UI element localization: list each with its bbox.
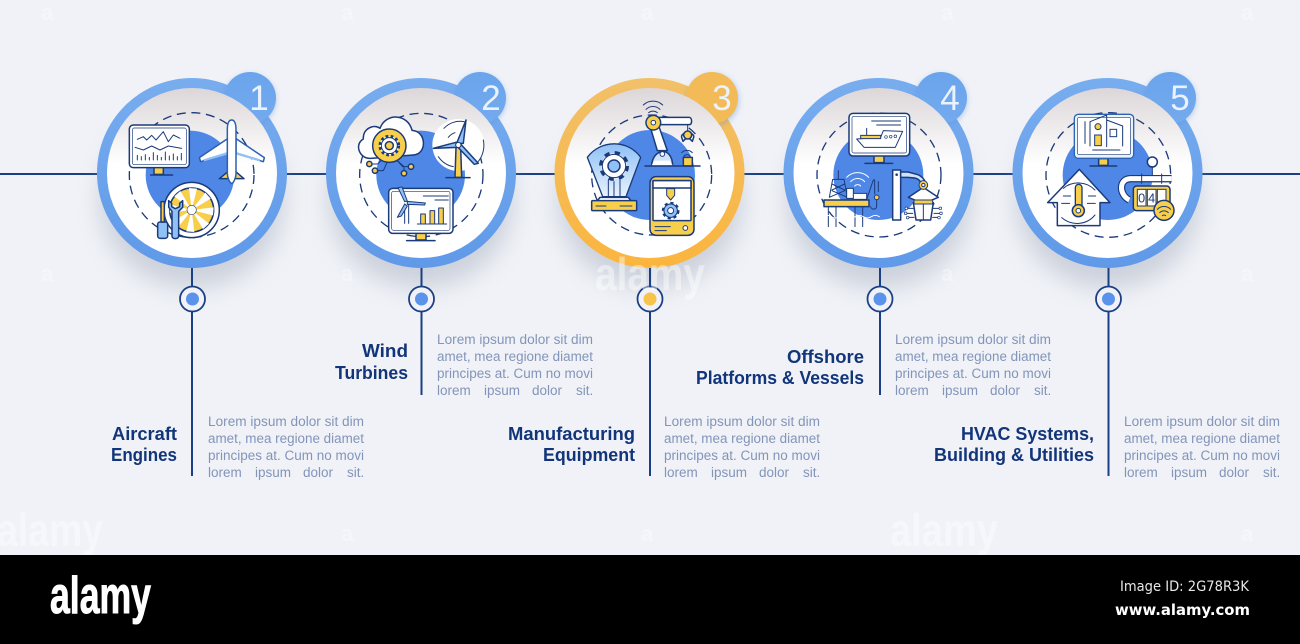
number badge 1: [224, 72, 276, 126]
body text 5: Lorem ipsum dolor sit dim: [1124, 414, 1280, 429]
body text 4: Lorem ipsum dolor sit dim: [895, 332, 1051, 347]
body text 4: dolor: [990, 383, 1021, 398]
ring 1: [97, 78, 287, 268]
body text 1: ipsum: [255, 465, 291, 480]
icon group 1: [129, 113, 264, 239]
connector 4: [868, 262, 892, 395]
icon: monitor with charts: [129, 125, 189, 175]
number badge 3: [686, 72, 739, 126]
icon: monitor with ship: [849, 113, 910, 163]
icon: 3d printer: [650, 177, 694, 235]
body text 3: lorem: [664, 465, 698, 480]
icon group 4: [817, 113, 942, 237]
watermarks: a: [1241, 0, 1254, 25]
label 3: manufacturing equipment: Equipment: [543, 445, 635, 465]
connector 5: [1096, 262, 1121, 476]
icon: hologram gear: [587, 144, 641, 211]
icon group 2: [359, 113, 484, 241]
icon: wind turbine: [432, 119, 484, 178]
icon group 5: [1046, 113, 1174, 237]
label 5: hvac systems, building and utilities: HVAC Systems,: [961, 424, 1094, 444]
body text 2: sit.: [576, 383, 593, 398]
body text 4: principes at. Cum no movi: [895, 366, 1051, 381]
icon: turbine fan: [164, 182, 219, 238]
step 1: aircraft engines: [97, 72, 287, 476]
watermarks: alamy: [0, 504, 103, 556]
icon: screwdriver and wrench: [158, 201, 183, 239]
number badge 3: 3: [712, 79, 732, 118]
icon: airplane: [199, 120, 264, 183]
alamy logo: alamy: [50, 567, 151, 625]
watermarks: a: [341, 0, 354, 25]
body text 1: sit.: [347, 465, 364, 480]
label 1: aircraft engines: Aircraft: [112, 424, 177, 444]
label 1: aircraft engines: Engines: [111, 445, 177, 465]
number badge 2: 2: [481, 79, 501, 118]
body text 3: ipsum: [711, 465, 747, 480]
body text 1: [208, 414, 364, 480]
body text 1: dolor: [303, 465, 334, 480]
icon: cloud gear: [359, 117, 423, 176]
number badge 5: [1144, 72, 1196, 126]
label 5: hvac systems, building and utilities: Building & Utilities: [934, 445, 1094, 465]
icon: robot arm: [643, 101, 700, 166]
body text 5: dolor: [1219, 465, 1250, 480]
icon: smart meter: [1121, 157, 1174, 220]
body text 3: [664, 414, 820, 480]
watermarks: a: [41, 261, 54, 286]
image id: Image ID: 2G78R3K: [1120, 579, 1250, 595]
icon: robot arm with vessel: [893, 170, 942, 220]
label 2: wind turbines: [335, 341, 408, 383]
website: www.alamy.com: [1115, 601, 1250, 619]
body text 4: [895, 332, 1051, 398]
icon: monitor with turbine: [389, 187, 453, 241]
ring 5: [1012, 78, 1202, 268]
watermarks: a: [341, 521, 354, 546]
body text 1: lorem: [208, 465, 242, 480]
number badge 4: [915, 72, 967, 126]
label 4: offshore platforms and vessels: Offshore: [787, 347, 864, 367]
body text 5: amet, mea regione diamet: [1124, 431, 1280, 446]
number badge 5: 5: [1170, 79, 1190, 118]
ring 4: [784, 78, 974, 268]
body text 5: ipsum: [1171, 465, 1207, 480]
body text 2: Lorem ipsum dolor sit dim: [437, 332, 593, 347]
icon: house thermostat: [1048, 169, 1110, 226]
ring 2: [326, 78, 516, 268]
step 3: manufacturing equipment: [554, 72, 744, 476]
watermarks: a: [941, 261, 954, 286]
step 5: hvac systems: [1012, 72, 1202, 476]
watermarks: a: [641, 521, 654, 546]
icon: oil rig: [823, 171, 879, 227]
label 4: offshore platforms and vessels: Platforms & Vessels: [696, 368, 864, 388]
label 4: offshore platforms and vessels: [696, 347, 864, 388]
watermarks: alamy: [890, 504, 998, 556]
body text 2: ipsum: [484, 383, 520, 398]
body text 4: amet, mea regione diamet: [895, 349, 1051, 364]
label 3: manufacturing equipment: Manufacturing: [508, 424, 635, 444]
body text 3: sit.: [803, 465, 820, 480]
connector 2: [409, 262, 434, 395]
watermarks: a: [941, 0, 954, 25]
watermarks: a: [341, 261, 354, 286]
body text 1: principes at. Cum no movi: [208, 448, 364, 463]
step 4: offshore platforms: [784, 72, 974, 395]
label 1: aircraft engines: [111, 424, 177, 465]
body text 3: principes at. Cum no movi: [664, 448, 820, 463]
label 5: hvac systems, building and utilities: [934, 424, 1094, 465]
body text 4: lorem: [895, 383, 929, 398]
body text 3: Lorem ipsum dolor sit dim: [664, 414, 820, 429]
number badge 4: 4: [940, 79, 960, 118]
label 2: wind turbines: Turbines: [335, 363, 408, 383]
body text 2: amet, mea regione diamet: [437, 349, 593, 364]
body text 5: principes at. Cum no movi: [1124, 448, 1280, 463]
body text 3: amet, mea regione diamet: [664, 431, 820, 446]
watermarks: a: [641, 0, 654, 25]
footer bar: [0, 555, 1300, 644]
label 3: manufacturing equipment: [508, 424, 635, 465]
body text 2: lorem: [437, 383, 471, 398]
body text 5: [1124, 414, 1280, 480]
icon: smart meter: 4: [1148, 192, 1155, 206]
body text 5: sit.: [1263, 465, 1280, 480]
horizontal timeline: [0, 173, 1300, 175]
body text 5: lorem: [1124, 465, 1158, 480]
watermarks: a: [1241, 521, 1254, 546]
body text 2: dolor: [532, 383, 563, 398]
body text 2: [437, 332, 593, 398]
ring 3: [554, 78, 744, 268]
body text 4: ipsum: [942, 383, 978, 398]
step 2: wind turbines: [326, 72, 516, 395]
number badge 1: 1: [249, 79, 269, 118]
number badge 2: [454, 72, 506, 126]
body text 3: dolor: [759, 465, 790, 480]
connector 3: [638, 262, 662, 476]
body text 2: principes at. Cum no movi: [437, 366, 593, 381]
watermarks: a: [41, 0, 54, 25]
watermarks: alamy: [595, 248, 705, 300]
body text 1: amet, mea regione diamet: [208, 431, 364, 446]
icon group 3: [587, 101, 712, 235]
icon: smart meter: 0: [1138, 192, 1145, 206]
watermarks: a: [1241, 261, 1254, 286]
icon: monitor with building: [1074, 114, 1134, 166]
body text 1: Lorem ipsum dolor sit dim: [208, 414, 364, 429]
body text 4: sit.: [1034, 383, 1051, 398]
label 2: wind turbines: Wind: [362, 341, 408, 361]
connector 1: [180, 262, 205, 476]
